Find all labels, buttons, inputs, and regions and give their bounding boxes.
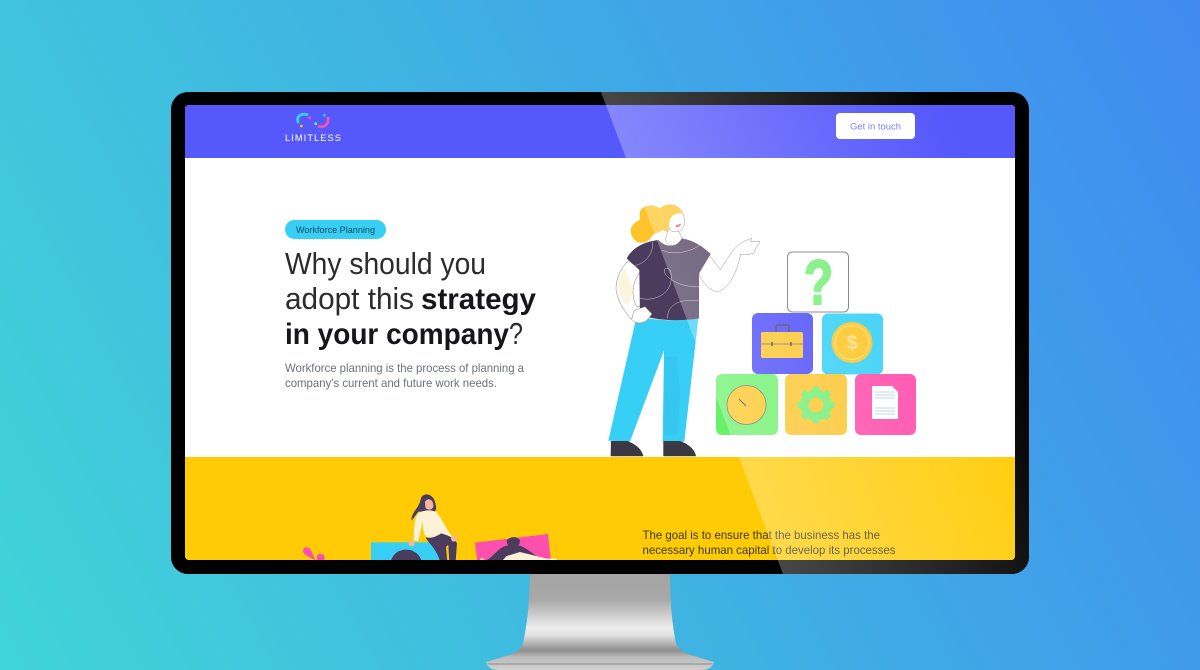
- hand on hip: [632, 307, 652, 323]
- logo: LIMITLESS: [285, 133, 341, 143]
- pink block: [475, 534, 551, 562]
- main heading: [285, 246, 536, 351]
- illustration: blocks: [716, 247, 916, 435]
- monitor stand: [486, 572, 714, 670]
- tag: workforce planning: Workforce Planning: [296, 225, 375, 236]
- goal paragraph: [642, 530, 896, 556]
- mouth: [675, 224, 681, 227]
- pants shading: [664, 357, 680, 435]
- block: clock: [716, 374, 778, 435]
- face: [668, 213, 685, 232]
- left arm: [616, 260, 640, 320]
- goal paragraph: necessary human capital to develop its processes: [642, 543, 896, 557]
- block: question mark: [787, 252, 849, 312]
- ponytail: [631, 205, 663, 243]
- block: briefcase: [752, 313, 813, 374]
- block: dollar coin: [822, 314, 883, 374]
- block: dollar coin: $: [846, 332, 858, 354]
- header bar: [185, 105, 1015, 158]
- hair: [660, 204, 684, 232]
- page background: [185, 105, 1015, 560]
- goal paragraph: The goal is to ensure that the business has the: [642, 528, 880, 542]
- dark hair shape: [391, 550, 422, 560]
- main heading: ?: [509, 316, 523, 351]
- seated woman: [409, 494, 457, 562]
- shirt: [627, 238, 711, 320]
- reclining man: [480, 537, 557, 562]
- pants: [608, 316, 698, 442]
- shirt pattern: [633, 242, 700, 318]
- screen glare: [601, 92, 1029, 574]
- intro paragraph: company's current and future work needs.: [285, 376, 497, 390]
- neck: [665, 229, 682, 246]
- main heading: adopt this: [285, 281, 414, 316]
- illustration: team: [303, 494, 557, 562]
- intro paragraph: Workforce planning is the process of planning a: [285, 361, 524, 375]
- block: gear: [785, 374, 847, 435]
- get in touch button: [836, 113, 915, 139]
- screen: [185, 105, 1015, 562]
- get in touch button: Get in touch: [850, 122, 901, 132]
- pink drops: [303, 547, 325, 562]
- logo: [285, 114, 341, 143]
- main heading: strategy: [421, 283, 536, 316]
- illustration: woman: [608, 205, 760, 456]
- blue block: [371, 542, 440, 560]
- block: document: [855, 374, 916, 435]
- yellow section: [185, 457, 1015, 560]
- main heading: Why should you: [285, 246, 486, 281]
- intro paragraph: [285, 364, 524, 390]
- monitor mockup: [171, 92, 1029, 670]
- tag: workforce planning: [285, 220, 386, 239]
- raised arm and hand: [699, 238, 760, 292]
- main heading: in your company: [285, 318, 509, 351]
- block: question mark: ?: [804, 247, 833, 318]
- arm shading: [618, 268, 633, 305]
- monitor bezel: [171, 92, 1029, 574]
- shoes: [611, 441, 643, 456]
